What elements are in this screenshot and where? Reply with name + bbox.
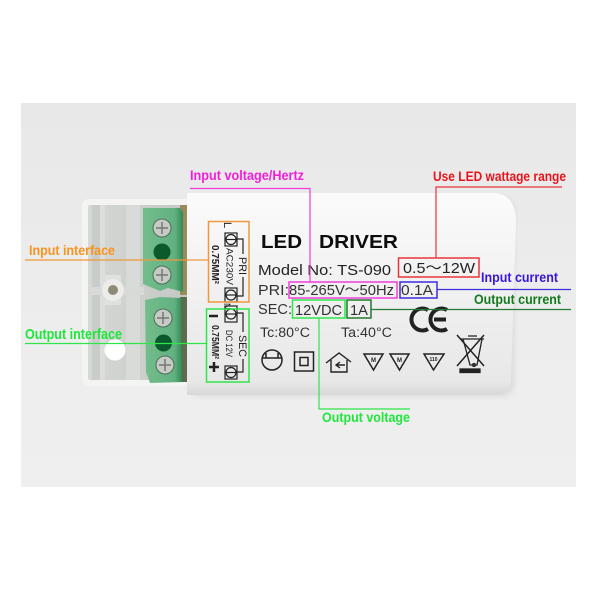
polarity label: PRI: PRI <box>236 257 248 275</box>
ambient temperature: Ta:40°C <box>341 325 392 340</box>
terminal housing <box>82 199 194 386</box>
polarity label: PRI <box>209 222 248 310</box>
terminal block: output <box>145 297 188 383</box>
callout: input current <box>400 269 571 298</box>
polarity label: PRI: AC230V <box>224 248 234 285</box>
polarity label: PRI: 0.75MM² <box>209 245 220 285</box>
icon: circle safety mark <box>262 350 282 370</box>
case temperature: Tc:80°C <box>260 325 310 340</box>
icon: indoor use house <box>326 353 351 372</box>
polarity label: SEC <box>209 306 248 379</box>
background panel <box>21 103 576 487</box>
callout: input voltage/hertz: Input voltage/Hertz <box>190 167 304 183</box>
icon: double insulated square <box>294 352 314 371</box>
callout: LED wattage range <box>398 168 566 277</box>
callout: output voltage: Output voltage <box>322 409 410 425</box>
callout: input current: Input current <box>481 269 558 285</box>
polarity label: PRI: L <box>221 222 233 228</box>
callout: output current <box>347 291 571 318</box>
icon: CE mark <box>411 308 447 330</box>
SEC label: SEC: <box>258 302 292 318</box>
polarity label: SEC: 0.75MM² <box>209 325 220 360</box>
output current value: 1A <box>350 303 368 319</box>
callout: output interface <box>25 309 249 382</box>
terminal block: input <box>143 205 188 295</box>
driver device <box>82 193 516 396</box>
model number: Model No: TS-090 <box>258 263 391 279</box>
callout: output interface: Output interface <box>25 326 122 343</box>
heading: LED DRIVER: LED <box>261 231 302 252</box>
callout: input interface: Input interface <box>29 242 115 258</box>
output voltage value: 12VDC <box>295 303 342 319</box>
input voltage value: 85-265V～50Hz <box>289 283 394 299</box>
polarity label: SEC: DC 12V <box>224 330 234 357</box>
callout: input voltage/hertz <box>190 167 397 298</box>
polarity label: SEC: SEC <box>236 335 248 357</box>
input current value: 0.1A <box>401 283 433 299</box>
icon: crossed-out bin <box>457 335 484 372</box>
PRI label: PRI: <box>258 283 289 299</box>
callout: output current: Output current <box>474 291 561 307</box>
icon: M triangle two: M <box>397 358 402 364</box>
icon: 110 triangle <box>424 354 444 370</box>
heading: LED DRIVER <box>261 231 398 252</box>
mounting hole <box>104 340 126 360</box>
callout: input interface <box>25 222 249 302</box>
icon: M triangle two <box>390 354 409 370</box>
polarity label: PRI: N <box>222 303 232 310</box>
wattage value: 0.5～12W <box>403 261 475 277</box>
icon: 110 triangle: 110 <box>429 357 438 363</box>
mounting post <box>102 275 124 305</box>
callout: output voltage <box>292 300 410 425</box>
main housing body <box>187 193 516 396</box>
heading: LED DRIVER: DRIVER <box>319 231 398 252</box>
icon: M triangle one <box>364 354 383 370</box>
icon: M triangle one: M <box>371 358 376 364</box>
callout: LED wattage range: Use LED wattage range <box>433 168 566 184</box>
